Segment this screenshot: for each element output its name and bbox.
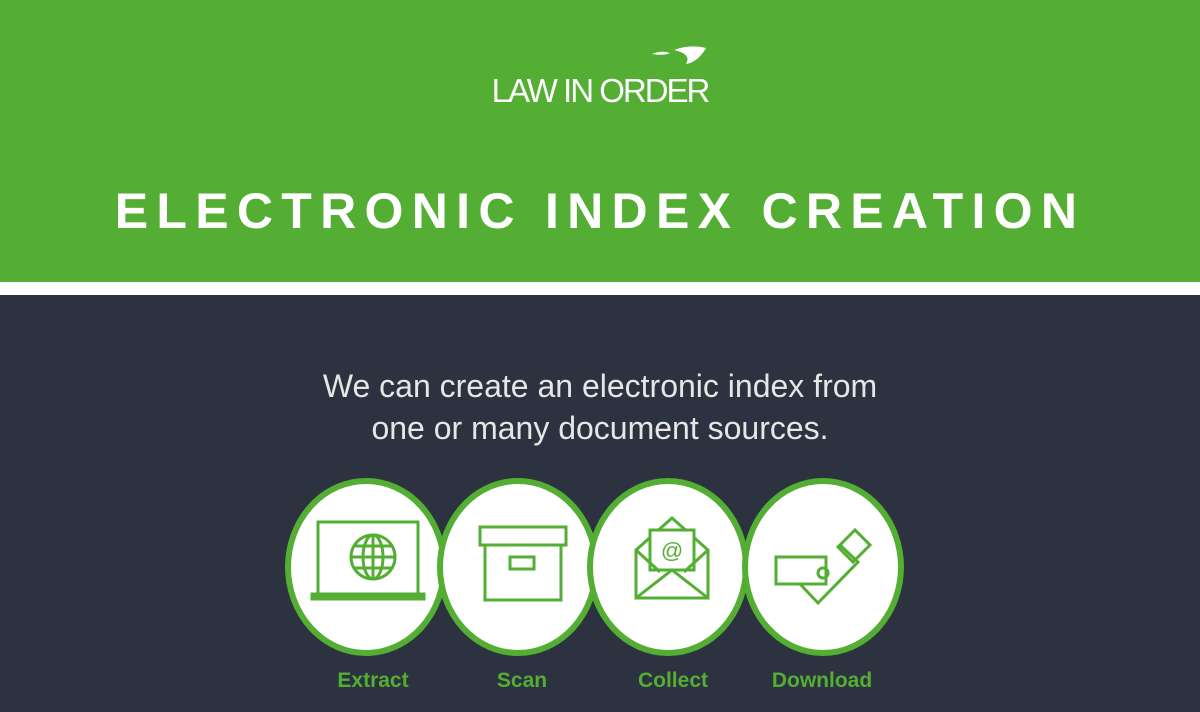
title: ELECTRONIC INDEX CREATION xyxy=(115,183,1085,239)
white stripe xyxy=(0,282,1200,295)
logo text: LAW IN ORDER xyxy=(492,72,708,109)
icon: logo bird xyxy=(652,46,706,64)
label: collect: Collect xyxy=(638,669,708,692)
circle: extract xyxy=(288,481,444,653)
header panel xyxy=(0,0,1200,282)
logo xyxy=(492,46,709,109)
subtitle text xyxy=(323,368,877,446)
circle: collect xyxy=(590,481,746,653)
icon: box xyxy=(480,527,566,600)
labels xyxy=(337,669,872,692)
icon: usb stick xyxy=(776,530,870,603)
label: download: Download xyxy=(772,669,872,692)
icon: laptop globe xyxy=(312,522,424,599)
subtitle text: one or many document sources. xyxy=(371,410,829,446)
label: extract: Extract xyxy=(337,669,409,692)
circle: scan xyxy=(440,481,596,653)
subtitle text: We can create an electronic index from xyxy=(323,368,877,404)
icon: envelope xyxy=(636,518,708,598)
icons row xyxy=(285,478,904,656)
label: scan: Scan xyxy=(497,669,547,692)
icon: envelope: @ xyxy=(661,538,683,563)
circle: download xyxy=(745,481,901,653)
